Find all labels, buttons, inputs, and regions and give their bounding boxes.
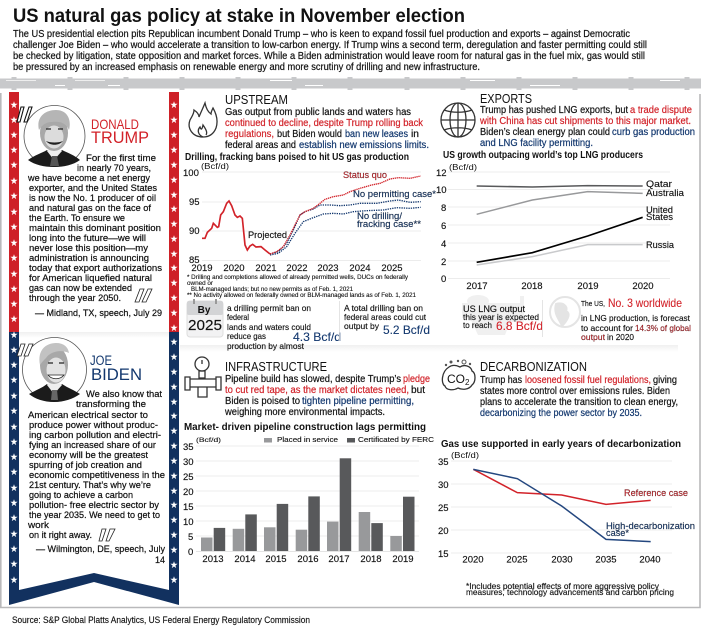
opening quote mark [17,107,32,122]
intro text: be checked by litigation, state opposition and market forces. While a Biden administration would leave room for natural gas in the fuel mix, gas would still [13,51,645,62]
line chart: US gas production: fracking case** [357,219,421,230]
heading: infrastructure: INFRASTRUCTURE [225,359,327,374]
intro text: challenger Joe Biden – who would accelerate a transition to low-carbon energy. If Trump wins a second term, deregulation and faster permitting could still [13,40,647,51]
line chart: gas use: 2025 [506,554,528,566]
quote: Trump: for American liquefied natural [29,273,152,284]
intro text: The US presidential election pits Republican incumbent Donald Trump – who is keen to expand fossil fuel production and exports – against Democratic [13,29,630,40]
quote: Trump [27,153,162,319]
quote: Trump: maintain this dominant position [29,223,161,234]
bar chart: pipeline capacity: 2013 [202,554,224,565]
line chart: LNG producers: States [646,212,673,223]
text: exports: and LNG facility permitting. [480,138,593,149]
footnotes: upstream [187,274,416,299]
line chart: gas use [438,450,695,566]
line chart: LNG producers [436,162,685,292]
line chart: gas use: Reference case [624,488,688,499]
line chart: LNG producers: 12 [436,168,447,179]
source: Source: S&P Global Platts Analytics, US Federal Energy Regulatory Commission [12,615,310,625]
bar chart: pipeline capacity [183,435,435,565]
icon: calendar 2025 [187,299,223,337]
line chart: gas use: 20 [438,526,449,537]
footnote: decarbonization [466,581,674,597]
title: US natural gas policy at stake in November election [13,6,465,27]
bar chart: pipeline capacity: 10 [183,517,194,528]
callout: No. 3 worldwide: The US, [581,299,605,308]
footnotes: upstream: ** No activity allowed on federally owned or BLM-managed lands as of Feb. 1, 2021 [187,292,416,299]
text: exports: Trump has pushed LNG exports, but [480,105,628,116]
bar chart: pipeline capacity: Placed in service [277,435,338,444]
closing quote mark [135,289,152,302]
section shadows [19,332,678,352]
panel: infrastructure [183,357,435,565]
callout: 6.8 Bcf/d: 6.8 Bcf/d [496,319,543,333]
line chart: LNG producers: (Bcf/d) [449,162,477,172]
text: infrastructure: tighten pipeline permitting, [302,396,414,407]
callout: No. 3 worldwide: 14.3% of global [635,323,691,333]
heading: exports: EXPORTS [480,91,532,106]
callout: 4.3 Bcf/d [227,303,341,351]
icon: faint globe [550,297,580,327]
text: decarbonization: states more control over emissions rules. Biden [480,386,670,397]
bar chart: pipeline capacity: 0 [188,547,193,558]
text: upstream: establish new emissions limits. [299,140,429,151]
line chart: gas use: 25 [438,503,449,514]
line chart: LNG producers: Russia [646,240,675,251]
line chart: gas use: (Bcf/d) [451,450,479,460]
line chart: US gas production: 85 [189,255,200,266]
icon: globe [441,103,475,137]
quote: Biden: ing carbon pollution and electri- [29,430,161,441]
quote: Biden: American electrical sector to [28,410,148,421]
callout: 4.3 Bcf/d: reduce gas [227,331,266,341]
icon: calendar 2025: By [198,305,211,316]
panel: upstream [183,92,436,351]
panel: Trump [17,106,162,319]
callout: 5.2 Bcf/d [339,301,430,341]
quote: Trump: through the year 2050. [29,293,121,304]
chart heading: drilling: Drilling, fracking bans poised to hit US gas production [185,152,409,163]
quote: Trump: today that export authorizations [29,263,162,274]
quote: Biden: work [27,520,49,531]
line chart: US gas production: 2025 [381,263,403,274]
closing quote mark [99,529,115,541]
intro text: be pressured by an increased emphasis on renewable energy and more scrutiny of drilling and new infrastructure. [13,62,480,73]
quote: Trump: the Earth. To ensure we [29,213,125,224]
name: Donald Trump: TRUMP [91,128,149,147]
callout: No. 3 worldwide: No. 3 worldwide [608,296,682,310]
quote: Trump: — Midland, TX, speech, July 29 [35,308,162,319]
callout: 4.3 Bcf/d: a drilling permit ban on [227,303,311,313]
text: infrastructure [224,374,430,418]
quote: Biden: produce power without produc- [29,420,158,431]
bar chart: pipeline capacity: Certificated by FERC [358,435,435,444]
line chart: gas use: 2040 [639,554,661,566]
callout: 5.2 Bcf/d: 5.2 Bcf/d [383,323,430,337]
line chart: US gas production [183,161,436,274]
name: Joe Biden: BIDEN [91,365,142,384]
heading: decarbonization: DECARBONIZATION [480,359,587,374]
text: upstream: Gas output from public lands and waters has [225,107,411,118]
line chart: gas use: 2020 [462,554,484,566]
name: Joe Biden [90,353,142,384]
text: upstream: in [411,129,419,140]
text: infrastructure: to cut red tape, as the market dictates need, [225,385,409,396]
line chart: LNG producers: 6 [441,221,446,232]
text: upstream: regulations, [225,129,274,140]
quote: Biden: fying an increased share of our [29,440,157,451]
text: infrastructure: but [411,385,425,396]
quote: Biden: 14 [155,555,166,566]
line chart: gas use: case* [606,528,629,539]
line chart: LNG producers: 10 [436,185,447,196]
line chart: US gas production: 95 [189,197,200,208]
heading: upstream: UPSTREAM [225,92,288,107]
portrait: Trump [24,106,85,167]
line chart: LNG producers: 4 [441,239,446,250]
line chart: US gas production: 2021 [255,263,277,274]
chart heading: LNG: US growth outpacing world’s top LNG producers [443,150,643,161]
line chart: US gas production: 2022 [286,263,308,274]
text: decarbonization: plans to accelerate the transition to clean energy, [480,397,678,408]
quote: Trump: administration is announcing [29,253,149,264]
line chart: gas use: 30 [438,480,449,491]
text: infrastructure: pledge [403,374,430,385]
text: decarbonization: Trump has [480,375,522,386]
text: infrastructure: weighing more environmental impacts. [224,407,385,418]
text: upstream: federal areas and [225,140,296,151]
callout: No. 3 worldwide: in 2020 [607,332,634,342]
line chart: LNG producers: 0 [441,274,446,285]
bar chart: pipeline capacity: 15 [183,502,194,513]
quote: Trump: gas can now be extended [29,283,132,294]
line chart: LNG producers: Australia [646,188,685,199]
text: decarbonization [480,375,678,419]
panel: exports [436,91,695,342]
line chart: LNG producers: 2 [441,257,446,268]
text: exports [479,105,695,149]
icon: pipe gauge [185,357,221,397]
name: Donald Trump: DONALD [91,116,139,132]
line chart: US gas production: (Bcf/d) [201,161,229,171]
quote: Trump: and natural gas on the face of [29,203,151,214]
quote: Biden: economic competitiveness in the [29,470,165,481]
bar chart: pipeline capacity: 2017 [328,554,350,565]
line chart: LNG producers: 2019 [577,281,599,292]
quote: Biden: pollution- free electric sector by [29,500,159,511]
footnote: decarbonization: measures, technology advancements and carbon pricing [466,587,674,597]
footnote: decarbonization: *Includes potential effects of more aggressive policy [466,581,660,591]
quote: Biden [27,389,166,566]
line chart: US gas production: 2019 [191,263,213,274]
callout: 6.8 Bcf/d [463,300,543,337]
quote: Trump: is now the No. 1 producer of oil [29,193,156,204]
bar chart: pipeline capacity: (Bcf/d) [196,437,221,444]
text: infrastructure: Biden is poised to [225,396,300,407]
line chart: US gas production: 100 [183,168,199,179]
line chart: US gas production: No drilling/ [357,211,402,222]
line chart: gas use: 35 [438,457,449,468]
line chart: gas use: High-decarbonization [606,521,695,532]
line chart: LNG producers: 2017 [466,281,488,292]
line chart: gas use: 2035 [595,554,617,566]
callout: 4.3 Bcf/d: 4.3 Bcf/d [293,330,341,344]
text: decarbonization: loosened fossil fuel regulations, [525,375,651,386]
bar chart: pipeline capacity: 35 [183,442,194,453]
text: infrastructure: Pipeline build has slowed, despite Trump’s [225,374,401,385]
icon: CO2 cloud [442,360,475,390]
callout: 5.2 Bcf/d: federal areas could cut [344,312,427,322]
bar chart: pipeline capacity: 25 [183,472,194,483]
icon: flame [189,103,217,137]
bar chart: pipeline capacity: 2019 [392,554,414,565]
line chart: US gas production: 2020 [223,263,245,274]
callout: No. 3 worldwide: in LNG production, is forecast [581,313,691,323]
callout: 4.3 Bcf/d: federal [227,312,249,322]
callout: 6.8 Bcf/d: US LNG output [463,304,526,314]
quote: Biden: on it right away. [29,530,92,541]
quote: Biden: transforming the [76,399,146,410]
bar chart: pipeline capacity: 5 [188,532,193,543]
line chart: LNG producers: 8 [441,203,446,214]
quote: Trump: exporter, and the United States [29,183,157,194]
callout: 5.2 Bcf/d: A total drilling ban on [344,303,423,313]
footnotes: upstream: * Drilling and completions allowed of already permitted wells, DUCs on federally [187,274,409,281]
icon: CO2 cloud: 2 [465,378,470,387]
text: upstream [225,107,429,151]
quote: Biden: — Wilmington, DE, speech, July [36,544,165,555]
bar chart: pipeline capacity: 2015 [265,554,287,565]
text: upstream: continued to decline, despite Trump rolling back [225,118,424,129]
panel: Biden [17,338,166,566]
callout: No. 3 worldwide: output [581,332,606,342]
quote: Biden: 21st century. That’s why we’re [29,480,151,491]
quote: Biden: going to achieve a carbon [29,490,133,501]
text: exports: with China has cut shipments to this major market. [479,116,691,127]
line chart: US gas production: Projected [248,230,287,241]
icon: CO2 cloud: CO [447,372,465,386]
quote: Biden: economy will be the greatest [29,450,148,461]
name: Joe Biden: JOE [90,353,112,368]
line chart: US gas production: Status quo [343,170,387,181]
chart heading: gas use: Gas use supported in early years of decarbonization [441,439,681,450]
line chart: gas use: 2030 [551,554,573,566]
line chart: LNG producers: 2020 [632,281,654,292]
ribbon: red [9,92,179,332]
quote: Trump: never lose this position—my [29,243,148,254]
portrait: Biden [22,338,86,402]
quote: Trump: we have become a net energy [27,173,150,184]
callout: No. 3 worldwide [581,296,691,342]
line chart: US gas production: 2023 [317,263,339,274]
callout: 6.8 Bcf/d: to reach [463,320,492,330]
name: Donald Trump [91,116,149,147]
text: exports: Biden’s clean energy plan could [480,127,610,138]
text: exports: a trade dispute [630,105,692,116]
icon: faint LNG facility [462,295,524,335]
chart heading: pipeline: Market- driven pipeline construction lags permitting [184,422,426,433]
footnotes: upstream: owned or [187,280,214,287]
text: exports: curb gas production [612,127,695,138]
opening quote mark [17,344,33,356]
callout: 6.8 Bcf/d: this year is expected [463,312,539,322]
intro text [13,29,647,73]
panel: decarbonization [438,359,695,597]
line chart: gas use: 15 [438,549,449,560]
quote: Trump: For the first time [86,153,156,164]
quote: Biden: We also know that [86,389,162,400]
bar chart: pipeline capacity: 30 [183,457,194,468]
quote: Biden: spurring of job creation and [29,460,142,471]
quote: Trump: long into the future—we will [29,233,146,244]
bar chart: pipeline capacity: 2018 [360,554,382,565]
bar chart: pipeline capacity: 2016 [297,554,319,565]
line chart: US gas production: 90 [189,226,200,237]
text: upstream: but Biden would [277,129,342,140]
footnotes: upstream: BLM-managed lands; but no new permits as of Feb. 1, 2021 [191,286,353,293]
icon: calendar 2025: 2025 [188,317,222,334]
quote: Trump: in nearly 70 years, [77,163,151,174]
bar chart: pipeline capacity: 20 [183,487,194,498]
pipeline divider [0,77,701,90]
line chart: LNG producers: Qatar [646,179,672,190]
ribbon: blue [9,331,179,605]
text: decarbonization: decarbonizing the power sector by 2035. [480,408,642,419]
line chart: US gas production: 2024 [349,263,371,274]
line chart: LNG producers: 2018 [521,281,543,292]
line chart: US gas production: No permitting case* [353,189,436,200]
callout: 4.3 Bcf/d: lands and waters could [227,322,311,332]
callout: 5.2 Bcf/d: output by [344,321,380,331]
callout: No. 3 worldwide: to account for [581,323,633,333]
callout: 4.3 Bcf/d: production by almost [227,341,305,351]
quote: Biden: the year 2035. We need to get to [29,510,160,521]
text: decarbonization: giving [653,375,677,386]
line chart: LNG producers: United [646,205,673,216]
text: upstream: ban new leases [345,129,408,140]
bar chart: pipeline capacity: 2014 [234,554,256,565]
